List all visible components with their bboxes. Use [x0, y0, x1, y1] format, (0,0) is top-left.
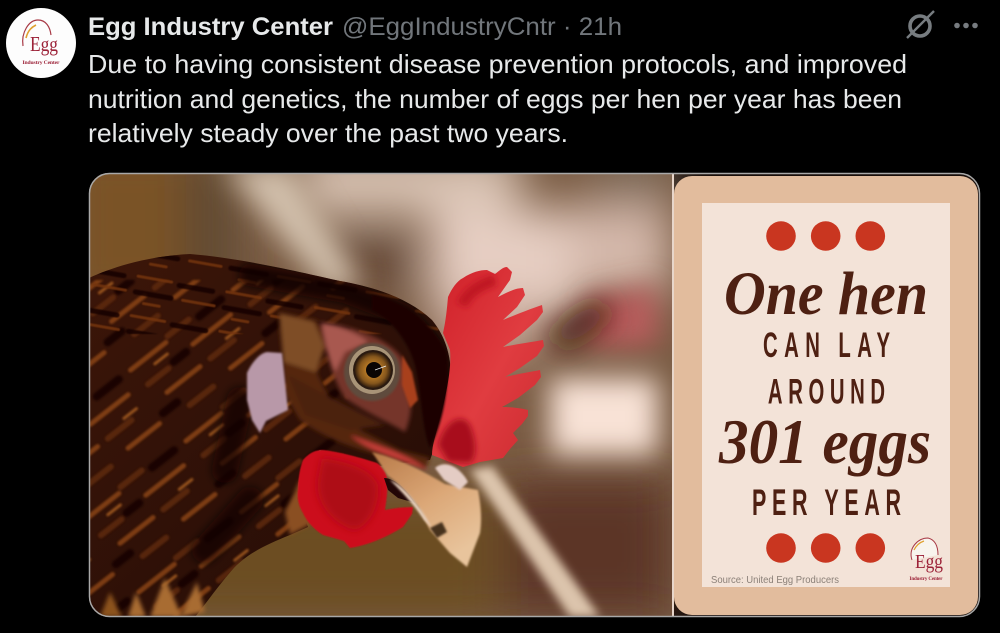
icon: slashed circle [907, 11, 934, 38]
avatar: Egg Industry Center logo: Egg [30, 32, 58, 56]
tweet body text [88, 49, 907, 148]
poster: source note: Source: United Egg Producers [711, 574, 839, 586]
photo: comb [432, 267, 544, 467]
poster: logo: Egg [915, 551, 943, 573]
poster: 301 eggs: 301 eggs [718, 406, 931, 477]
photo: beak [372, 452, 481, 567]
tweet body text: nutrition and genetics, the number of eggs per hen per year has been [88, 84, 902, 114]
poster: logo [910, 538, 943, 582]
photo: hen body and neck feathers [89, 254, 451, 617]
tweet author name and handle: Egg Industry Center [88, 13, 333, 41]
poster: tan frame [672, 173, 978, 617]
tweet body text: relatively steady over the past two years. [88, 118, 568, 148]
poster: top red dots [766, 221, 885, 251]
tweet author name and handle [88, 13, 622, 41]
photo: blurred background [60, 140, 672, 620]
media card [89, 173, 979, 617]
media card outline [90, 174, 980, 616]
photo: head and face [278, 295, 447, 470]
photo: ear lobe [247, 352, 288, 433]
poster: PER YEAR: PER YEAR [752, 483, 901, 524]
avatar: Egg Industry Center logo: Industry Center [22, 60, 60, 66]
photo: wattle [298, 450, 413, 548]
poster: cream panel [702, 203, 950, 587]
poster: logo: Industry Center [910, 577, 943, 582]
poster: heading One hen: One hen [724, 261, 928, 328]
poster: AROUND: AROUND [768, 373, 885, 412]
poster: bottom red dots [766, 533, 885, 563]
poster: CAN LAY: CAN LAY [763, 326, 890, 366]
photo: eye [344, 343, 400, 401]
avatar: Egg Industry Center logo [6, 8, 76, 78]
tweet body text: Due to having consistent disease prevention protocols, and improved [88, 49, 907, 79]
icon: more menu dots [954, 23, 978, 28]
tweet author name and handle: @EggIndustryCntr · 21h [342, 13, 622, 41]
